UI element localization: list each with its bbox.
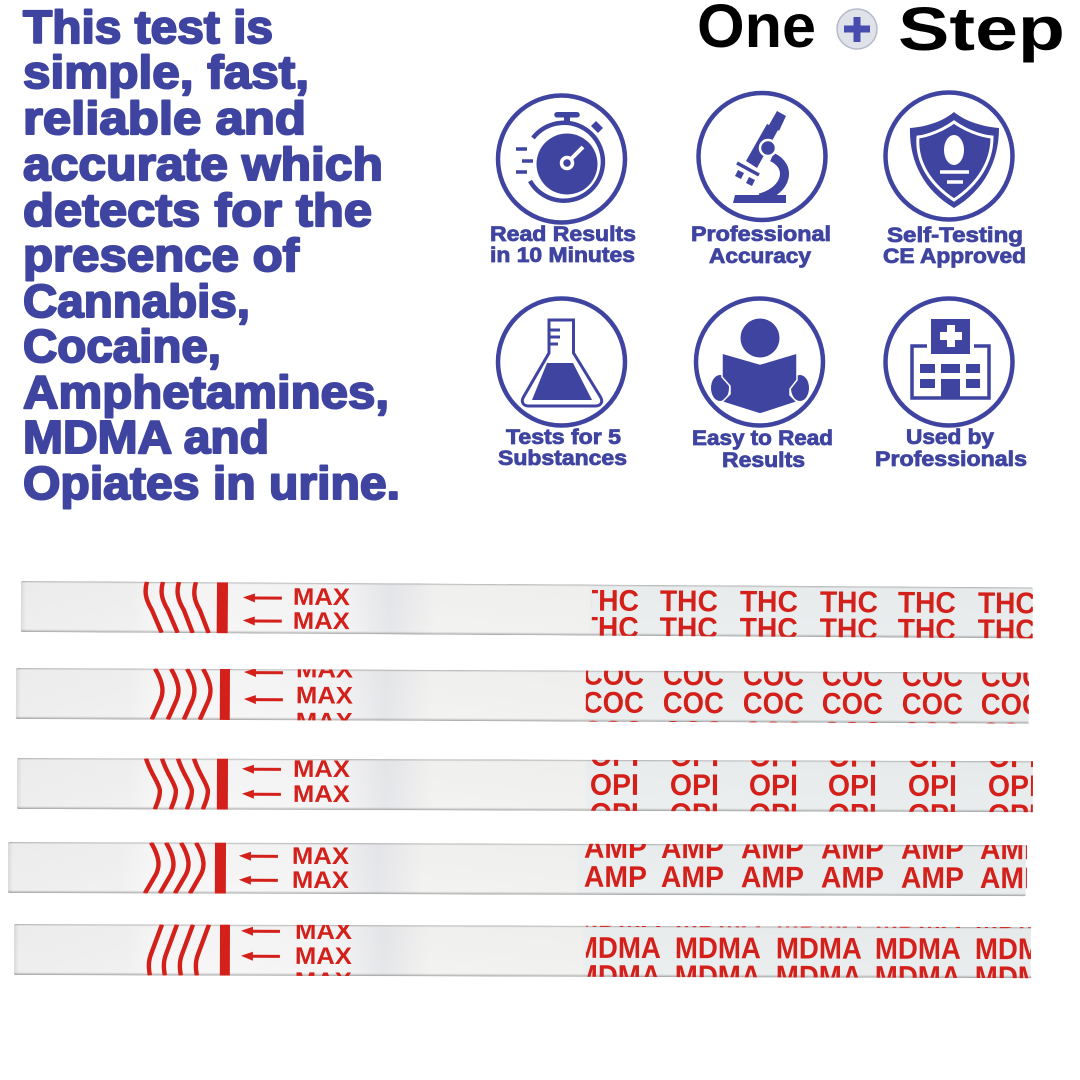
icon: stopwatch, read results in 10 minutes (490, 96, 636, 267)
test strip: OPI: OPI (590, 740, 639, 773)
test strip: COC: COC (981, 660, 1042, 694)
test strip: THC: THC (660, 612, 718, 645)
heading: test description: Opiates in urine. (23, 457, 400, 509)
icon: hospital, used by professionals (875, 298, 1027, 471)
test strip: AMP: AMP (901, 833, 964, 866)
test strip: MDMA: MDMA (675, 960, 761, 993)
test strip: THC: THC (898, 587, 956, 620)
icon: flask, tests for 5 substances (498, 298, 627, 470)
test strip: MDMA: MDMA (875, 902, 961, 935)
heading: test description: accurate which (23, 138, 383, 190)
test strip: OPI: OPI (908, 770, 957, 803)
icon: person reading, easy to read results: Easy to Read (692, 427, 833, 450)
icon: shield, self-testing CE approved (883, 92, 1026, 268)
test strip: THC: THC (581, 585, 639, 618)
test strip: AMP: AMP (741, 832, 804, 866)
test strip: THC (20, 581, 1033, 638)
icon: flask, tests for 5 substances: Tests for 5 (506, 426, 621, 449)
heading: test description: Cannabis, (23, 275, 250, 327)
test strip: MDMA: MDMA (875, 961, 961, 994)
test strip: COC: COC (981, 717, 1042, 751)
test strip: COC: COC (743, 716, 804, 750)
test strip: COC: COC (583, 687, 644, 720)
test strip: THC: MAX (293, 608, 350, 635)
test strip: COC: MAX (296, 656, 353, 684)
test strip: OPI: OPI (828, 799, 877, 832)
heading: test description: Amphetamines, (23, 366, 389, 418)
test strip: AMP: AMP (741, 861, 804, 895)
test strip: AMP: AMP (980, 833, 1043, 866)
test strip: OPI (17, 758, 1033, 812)
icon: microscope, professional accuracy (691, 93, 831, 268)
test strip: MDMA: MDMA (675, 901, 761, 934)
test strip: OPI: OPI (828, 741, 877, 774)
test strip: THC: THC (581, 612, 639, 645)
test strip: OPI: OPI (988, 770, 1037, 803)
test strip: AMP: AMP (980, 862, 1043, 895)
test strip: OPI: OPI (749, 798, 798, 831)
test strip: COC: COC (822, 660, 883, 693)
icon: shield, self-testing CE approved: CE Approved (883, 245, 1026, 268)
heading: test description (23, 1, 400, 509)
test strip: MDMA: MDMA (776, 932, 862, 966)
test strip: THC: THC (978, 587, 1036, 620)
heading: test description: reliable and (23, 92, 306, 144)
heading: test description: presence of (23, 229, 300, 281)
test strip: OPI: OPI (590, 798, 639, 831)
test strip: THC: MAX (293, 584, 350, 611)
icon: plus badge (837, 9, 877, 49)
test strip: AMP: AMP (901, 862, 964, 895)
test strip: OPI: OPI (828, 770, 877, 803)
test strip: COC: COC (822, 688, 883, 721)
test strip: COC: COC (981, 688, 1042, 722)
test strip: THC: THC (820, 613, 878, 646)
heading: test description: Cocaine, (23, 320, 221, 372)
icon: stopwatch, read results in 10 minutes: in 10 Minutes (490, 244, 635, 267)
test strip: THC: THC (740, 613, 798, 646)
test strip: COC: MAX (296, 682, 353, 710)
test strip: MDMA: MDMA (776, 960, 862, 994)
icon: microscope, professional accuracy: Accuracy (709, 245, 811, 268)
test strip: MDMA: MDMA (875, 933, 961, 966)
icon: hospital, used by professionals: Professionals (875, 448, 1027, 471)
test strip: COC: COC (663, 716, 724, 749)
test strip: AMP: AMP (821, 862, 884, 895)
test strip: COC: COC (902, 688, 963, 721)
test strip: OPI: MAX (293, 756, 350, 783)
test strip: COC: COC (902, 717, 963, 750)
test strip: THC: THC (660, 585, 718, 618)
heading: test description: detects for the (23, 184, 372, 236)
test strip: AMP (8, 842, 1027, 896)
test strip: OPI: OPI (988, 741, 1037, 774)
test strip: AMP: MAX (292, 867, 349, 894)
test strip: MDMA: MDMA (776, 901, 862, 935)
test strip: MDMA: MAX (295, 918, 352, 945)
icon: person reading, easy to read results: Results (722, 449, 805, 472)
test strip: OPI: OPI (908, 741, 957, 774)
icon: shield, self-testing CE approved: Self-Testing (887, 224, 1023, 247)
test strip: OPI: MAX (293, 781, 350, 808)
heading: test description: This test is (23, 1, 273, 53)
test strip: OPI: OPI (749, 740, 798, 773)
test strip: MDMA: MDMA (575, 901, 661, 934)
test strip: MDMA: MDMA (975, 902, 1061, 935)
test strip: OPI: OPI (670, 798, 719, 831)
test strip: COC: MAX (296, 708, 353, 736)
test strip: OPI: OPI (908, 799, 957, 832)
test strip: MDMA: MAX (295, 968, 352, 995)
test strip: THC: THC (820, 586, 878, 619)
test strip: AMP: AMP (661, 832, 724, 865)
logo: One Step (697, 0, 1065, 63)
test strip: OPI: OPI (749, 769, 798, 802)
test strip: COC: COC (822, 717, 883, 750)
test strip: AMP: AMP (584, 832, 647, 865)
test strip: COC: COC (583, 716, 644, 749)
test strip: OPI: OPI (988, 799, 1037, 832)
test strip: AMP: MAX (292, 843, 349, 870)
test strip: OPI: OPI (670, 740, 719, 773)
test strip: COC: COC (663, 659, 724, 692)
test strip: COC: COC (902, 660, 963, 693)
test strip: MDMA: MDMA (575, 932, 661, 965)
icon: stopwatch, read results in 10 minutes: Read Results (490, 223, 636, 246)
test strip: COC: COC (743, 687, 804, 721)
test strip: COC: COC (743, 659, 804, 693)
test strip: COC: COC (583, 659, 644, 692)
test strip: AMP: AMP (584, 861, 647, 894)
test strip: MDMA: MDMA (575, 960, 661, 993)
icon: microscope, professional accuracy: Professional (691, 223, 831, 246)
test strip: MDMA: MAX (295, 943, 352, 970)
icon: flask, tests for 5 substances: Substances (498, 447, 627, 470)
test strip: MDMA: MDMA (975, 961, 1061, 994)
test strip: OPI: OPI (670, 769, 719, 802)
heading: test description: MDMA and (23, 411, 269, 463)
icon: person reading, easy to read results (692, 298, 833, 472)
test strip: COC: COC (663, 687, 724, 720)
icon: hospital, used by professionals: Used by (906, 426, 994, 449)
test strip: OPI: OPI (590, 769, 639, 802)
heading: test description: simple, fast, (23, 46, 309, 98)
test strip: MDMA (14, 924, 1031, 978)
test strip: MDMA: MDMA (975, 933, 1061, 966)
test strip: THC: THC (898, 614, 956, 647)
test strip: AMP: AMP (661, 861, 724, 894)
test strip: AMP: AMP (821, 833, 884, 866)
test strip: THC: THC (978, 614, 1036, 647)
test strip: THC: THC (740, 586, 798, 619)
test strip: MDMA: MDMA (675, 932, 761, 965)
test strip: COC (16, 668, 1029, 724)
